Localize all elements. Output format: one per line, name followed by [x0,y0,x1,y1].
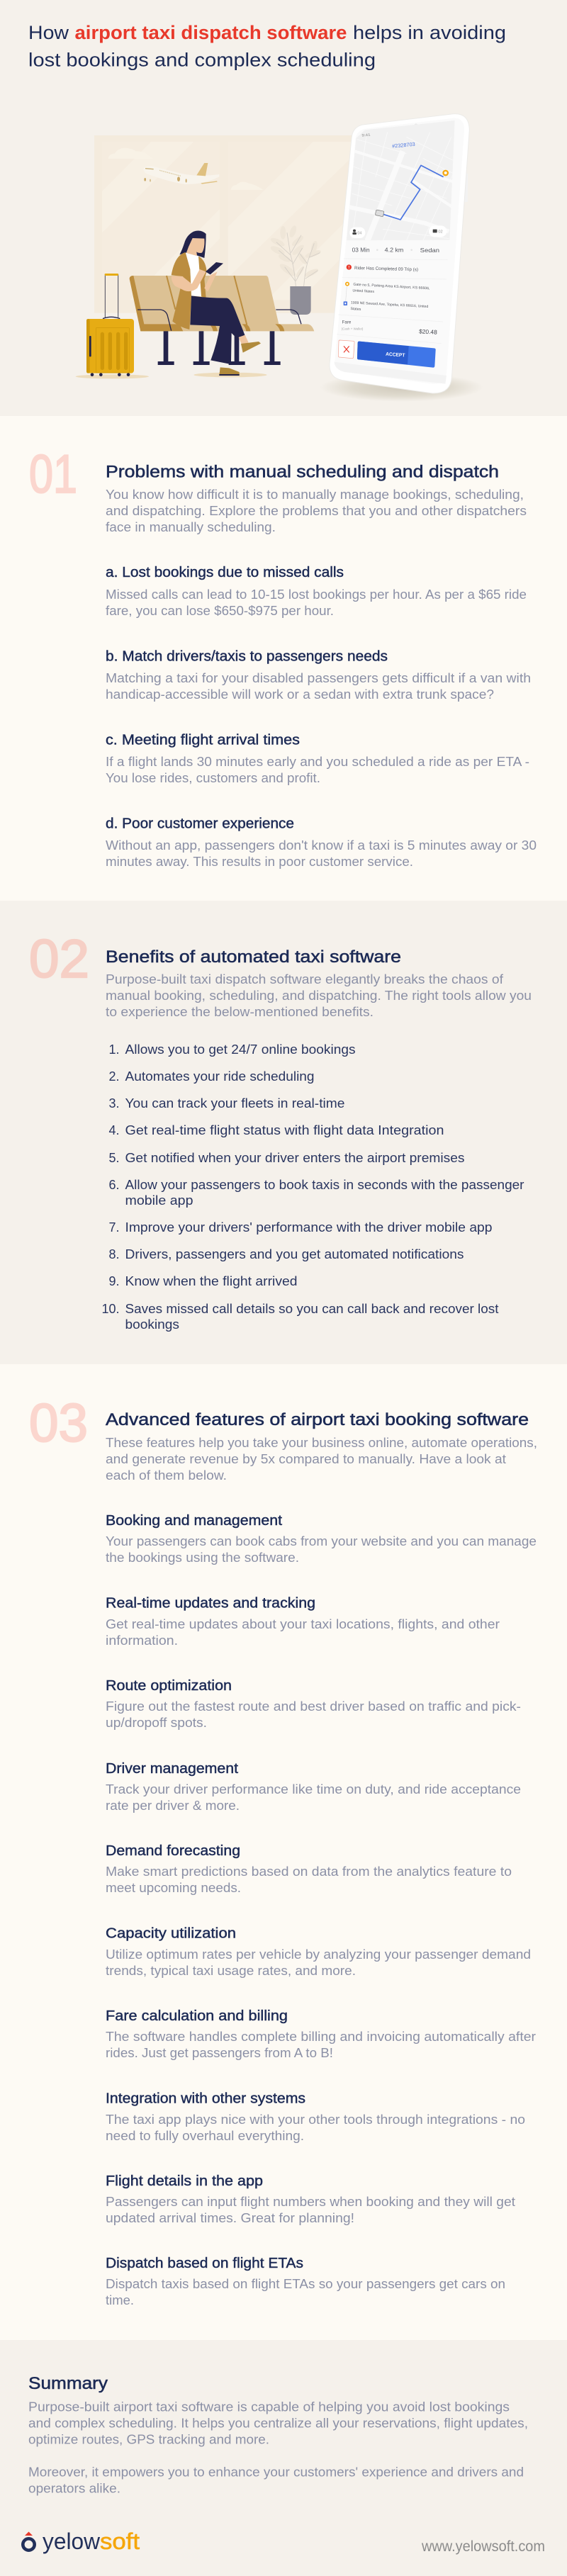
numbered benefits list: 3. [108,1096,119,1110]
accept and cancel buttons [338,340,436,368]
heading: problems: Problems with manual scheduling and dispatch [106,462,499,482]
feature: booking: Booking and management [106,1513,282,1529]
intro text: to experience the below-mentioned benefits. [106,1005,374,1019]
intro text [106,972,532,1019]
website url: www.yelowsoft.com [421,2538,545,2555]
feature: integration [106,2091,525,2143]
numbered benefits list: 1. [108,1042,119,1057]
feature: fare [106,2008,536,2060]
phone body [330,114,469,393]
feature: booking: Your passengers can book cabs from your website and you can manage [106,1534,537,1548]
problem a [106,565,527,618]
problem b: b. Match drivers/taxis to passengers needs [106,649,388,665]
numbered benefits list: bookings [125,1317,179,1332]
feature: capacity: Utilize optimum rates per vehicle by analyzing your passenger demand [106,1947,531,1962]
heading: features: Advanced features of airport taxi booking software [106,1410,529,1429]
feature: capacity: trends, typical taxi usage rates, and more. [106,1964,356,1978]
feature: driver: rate per driver & more. [106,1799,240,1813]
potted plant [269,225,322,315]
problem b [106,649,531,702]
fare: (Cash + Wallet) [342,327,364,331]
rider alert: ! [348,266,349,270]
addresses: 1909 NE Seward Ave, Topeka, KS 66616, United [351,300,429,309]
intro text: These features help you take your business online, automate operations, [106,1436,537,1450]
trip stats: Sedan [420,247,439,254]
number 02: 02 [29,929,89,989]
problem a: fare, you can lose $650-$975 per hour. [106,604,334,618]
feature: route: Figure out the fastest route and best driver based on traffic and pick- [106,1699,521,1714]
numbered benefits list: 9. [108,1274,119,1288]
trip stats: 03 Min [352,247,370,254]
feature: route: Route optimization [106,1678,232,1694]
feature: tracking: Real-time updates and tracking [106,1596,315,1612]
problem a: Missed calls can lead to 10-15 lost bookings per hour. As per a $65 ride [106,587,527,602]
feature: route [106,1678,521,1730]
number 01: 01 [29,444,77,505]
summary text: Purpose-built airport taxi software is capable of helping you avoid lost bookings [28,2400,510,2414]
intro text: face in manually scheduling. [106,520,276,534]
feature: tracking [106,1596,500,1648]
feature: dispatch: Dispatch based on flight ETAs [106,2256,303,2271]
woman with phone [172,231,261,376]
map with route: 02 [438,230,443,234]
problem c: If a flight lands 30 minutes early and you scheduled a ride as per ETA - [106,755,529,769]
map with route: #2328703 [392,141,415,150]
numbered benefits list: 7. [108,1220,119,1234]
illustration: woman waiting at airport [76,135,353,378]
intro text: and dispatching. Explore the problems that you and other dispatchers [106,504,527,518]
addresses: Gate no 5, Parking Area KS Airport, KS 66606, [353,283,430,291]
map with route: 9:41 [361,133,371,138]
numbered benefits list: 10. [101,1302,119,1316]
numbered benefits list: 2. [108,1069,119,1084]
numbered benefits list: 4. [108,1123,119,1137]
numbered benefits list: 5. [108,1151,119,1165]
airport window [94,135,353,313]
feature: demand: meet upcoming needs. [106,1881,241,1895]
title: airport taxi dispatch software [75,22,347,43]
numbered benefits list: 8. [108,1247,119,1261]
feature: flight details: Flight details in the app [106,2173,263,2189]
numbered benefits list: Allow your passengers to book taxis in seconds with the passenger [125,1178,524,1192]
intro text [106,1436,537,1483]
problem a: a. Lost bookings due to missed calls [106,565,344,580]
feature: capacity: Capacity utilization [106,1926,236,1942]
problem d: Without an app, passengers don't know if a taxi is 5 minutes away or 30 [106,838,537,853]
feature: integration: The taxi app plays nice with your other tools through integrations - no [106,2113,525,2127]
title: helps in avoiding [353,22,506,43]
numbered benefits list: Get real-time flight status with flight data Integration [125,1123,444,1137]
feature: flight details: Passengers can input flight numbers when booking and they will get [106,2195,515,2209]
intro text: manual booking, scheduling, and dispatching. The right tools allow you [106,989,532,1003]
numbered benefits list: Allows you to get 24/7 online bookings [125,1042,356,1057]
map with route [345,118,456,241]
feature: dispatch: time. [106,2293,134,2307]
intro text: Purpose-built taxi dispatch software elegantly breaks the chaos of [106,972,504,986]
summary text [28,2400,528,2496]
feature: fare: The software handles complete billing and invoicing automatically after [106,2030,536,2044]
numbered benefits list: Saves missed call details so you can call back and recover lost [125,1302,499,1316]
fare [342,320,437,336]
heading: benefits: Benefits of automated taxi software [106,947,401,967]
addresses: States [350,307,361,312]
feature: driver: Driver management [106,1761,238,1777]
summary text: optimize routes, GPS tracking and more. [28,2432,269,2446]
feature: booking [106,1513,537,1565]
problem b: handicap-accessible will work or a sedan with extra trunk space? [106,687,494,702]
logo: yelowsoft: soft [100,2529,140,2554]
numbered benefits list [101,1042,524,1332]
intro text: each of them below. [106,1468,227,1483]
feature: booking: the bookings using the software. [106,1551,299,1565]
feature: tracking: Get real-time updates about your taxi locations, flights, and other [106,1617,500,1631]
logo: yelowsoft [23,2529,140,2554]
feature: demand [106,1843,512,1895]
logo: yelowsoft: yelow [43,2529,101,2554]
map with route: 04 [357,231,361,235]
panel: section 03 advanced features [0,1364,567,2340]
feature: demand: Demand forecasting [106,1843,240,1859]
problem c: c. Meeting flight arrival times [106,733,300,748]
problem d: d. Poor customer experience [106,816,294,832]
title: How [28,22,69,43]
feature: tracking: information. [106,1633,178,1648]
feature: route: up/dropoff spots. [106,1716,207,1730]
summary text: operators alike. [28,2482,120,2496]
panel: summary and footer [0,2340,567,2576]
feature: fare: rides. Just get passengers from A to B! [106,2046,333,2060]
shadows under feet and suitcase [76,373,267,378]
feature: demand: Make smart predictions based on data from the analytics feature to [106,1864,512,1879]
panel: hero [30,26,505,400]
problem d [106,816,537,869]
feature: flight details: updated arrival times. Great for planning! [106,2211,354,2225]
summary text: Moreover, it empowers you to enhance your customers' experience and drivers and [28,2465,524,2479]
addresses [344,282,430,312]
numbered benefits list: Know when the flight arrived [125,1274,298,1288]
feature: driver: Track your driver performance like time on duty, and ride acceptance [106,1782,521,1796]
feature: dispatch: Dispatch taxis based on flight ETAs so your passengers get cars on [106,2277,505,2291]
illustration: phone with taxi app [329,113,473,400]
addresses: United States [352,288,375,294]
problem c: You lose rides, customers and profit. [106,771,320,785]
title [28,22,506,71]
feature: capacity [106,1926,531,1978]
title: lost bookings and complex scheduling [28,50,376,71]
trip stats: 4.2 km [385,247,403,254]
numbered benefits list: Automates your ride scheduling [125,1069,315,1084]
numbered benefits list: 6. [108,1178,119,1192]
feature: fare: Fare calculation and billing [106,2008,288,2024]
feature: integration: need to fully overhaul everything. [106,2129,304,2143]
intro text: You know how difficult it is to manually manage bookings, scheduling, [106,488,524,502]
numbered benefits list: You can track your fleets in real-time [125,1096,344,1110]
intro text [106,488,527,534]
trip stats [337,247,448,344]
summary text: and complex scheduling. It helps you centralize all your reservations, flight updates, [28,2417,528,2431]
fare: Fare [342,320,352,325]
problem d: minutes away. This results in poor customer service. [106,855,413,869]
suitcase [86,274,134,376]
feature: driver [106,1761,521,1813]
accept and cancel buttons: ACCEPT [386,352,405,359]
fare: $20.48 [419,327,437,336]
numbered benefits list: Improve your drivers' performance with the driver mobile app [125,1220,492,1234]
phone shadow [320,373,483,402]
numbered benefits list: Get notified when your driver enters the airport premises [125,1151,465,1165]
airplane [143,163,219,184]
intro text: and generate revenue by 5x compared to manually. Have a look at [106,1452,506,1466]
problem c [106,733,529,785]
numbered benefits list: mobile app [125,1193,193,1208]
numbered benefits list: Drivers, passengers and you get automated notifications [125,1247,464,1261]
panel: section 01 problems [0,416,567,901]
feature: dispatch [106,2256,505,2307]
heading: summary: Summary [28,2374,108,2393]
panel: section 02 benefits [0,901,567,1364]
feature: integration: Integration with other systems [106,2091,305,2106]
feature: flight details [106,2173,515,2225]
number 03: 03 [29,1393,88,1453]
problem b: Matching a taxi for your disabled passengers gets difficult if a van with [106,671,531,685]
rider alert: Rider Has Completed 09 Trip (s) [354,266,418,272]
bench [130,276,314,365]
